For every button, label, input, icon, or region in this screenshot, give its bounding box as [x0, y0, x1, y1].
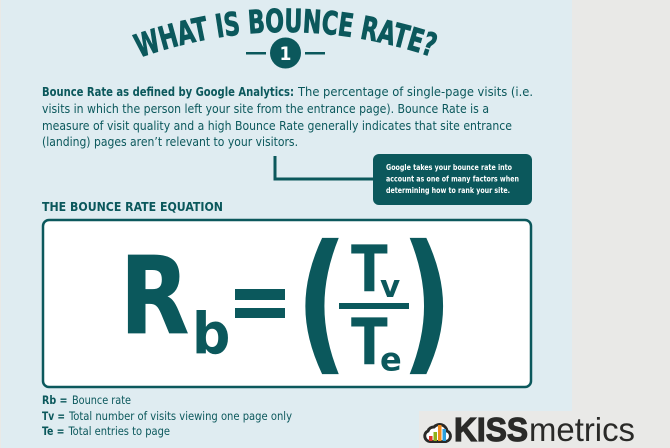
callout: Google takes your bounce rate into [386, 163, 512, 172]
legend: Total entries to page [68, 424, 170, 438]
equation: R sub b [120, 234, 230, 368]
legend: Total number of visits viewing one page only [68, 409, 292, 423]
equation: R sub b: R [120, 234, 189, 359]
equation: fraction bar [339, 303, 409, 309]
logo: KISSmetrics [419, 411, 670, 448]
equation panel [43, 211, 531, 390]
legend: Rb = [42, 393, 68, 407]
equation: numerator: v [380, 269, 400, 305]
legend [42, 393, 292, 438]
equation: denominator: T [351, 304, 388, 379]
callout: determining how to rank your site. [386, 186, 510, 195]
title: WHAT IS BOUNCE RATE? [132, 8, 438, 57]
text block: definition: The percentage of single-page visits (i.e. [297, 84, 533, 99]
legend: Te = [42, 424, 64, 438]
text block: definition: visits in which the person left your site from the entrance page). Bounce Rate is a [42, 101, 489, 116]
section number badge [246, 38, 325, 68]
text block: definition: (landing) pages aren’t relevant to your visitors. [42, 134, 298, 149]
wordmark: KISS [454, 411, 528, 448]
equation: R sub b: b [192, 302, 230, 368]
icon: cloud bar chart [425, 425, 450, 442]
equation: denominator: e [380, 340, 402, 378]
text block: definition [42, 84, 533, 149]
legend: Bounce rate [72, 393, 131, 407]
heading: equation: THE BOUNCE RATE EQUATION [42, 199, 223, 214]
callout [373, 154, 532, 205]
connector arrow [275, 156, 374, 179]
callout: account as one of many factors when [386, 174, 519, 184]
wordmark: metrics [529, 411, 635, 448]
legend: Tv = [42, 409, 65, 423]
equation: left parenthesis: ( [296, 211, 348, 390]
text block: definition: Bounce Rate as defined by Google Analytics: [42, 84, 294, 99]
section number badge: 1 [280, 43, 291, 65]
equation: equals [235, 289, 285, 318]
equation: numerator: T [351, 231, 388, 306]
equation: right parenthesis: ) [400, 211, 453, 390]
text block: definition: measure of visit quality and a high Bounce Rate generally indicates that site entrance [42, 118, 512, 133]
